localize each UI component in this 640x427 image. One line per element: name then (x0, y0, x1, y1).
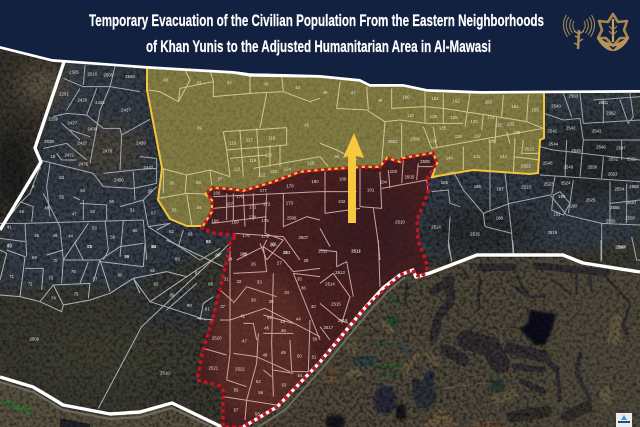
block number labels: 2504 (410, 136, 420, 141)
red zone: evacuation area (190, 150, 440, 427)
block number labels: 180 (311, 179, 319, 184)
block number labels: 2450 (114, 177, 124, 182)
block number labels: 135 (439, 126, 447, 131)
block number labels: 124 (284, 167, 292, 172)
block number labels: 2513 (335, 270, 345, 275)
block number labels: 179 (261, 234, 269, 239)
block number labels: 2427 (68, 121, 78, 126)
block number labels: 2514 (431, 225, 441, 230)
block number labels: 104 (380, 180, 388, 185)
block number labels: 163 (485, 100, 493, 105)
block number labels: 49 (281, 350, 286, 355)
block number labels: 81 (150, 268, 156, 273)
block number labels: 70 (53, 258, 58, 263)
block number labels: 2546 (596, 145, 606, 150)
block number labels: 40 (163, 77, 169, 82)
block number labels: 40 (7, 242, 12, 247)
farmland and dark wadi terrain (323, 266, 630, 427)
block number labels: 50 (109, 199, 115, 204)
block number labels: 142 (500, 154, 508, 159)
block number labels: 185 (441, 180, 449, 185)
block number labels: 2503 (388, 139, 398, 144)
block number labels: 69 (32, 255, 37, 260)
block number labels: 116 (229, 141, 237, 146)
block number labels: 190 (570, 203, 578, 208)
block number labels: 45 (304, 122, 310, 127)
block number labels: 120 (265, 152, 273, 157)
block number labels: 44 (296, 316, 301, 321)
block number labels: 2556 (610, 205, 620, 210)
block number labels: 52 (256, 379, 261, 384)
block number labels: 45 (264, 326, 270, 331)
block number labels: 57 (151, 211, 156, 216)
block number labels: 2521 (525, 146, 535, 151)
block number labels: 183 (283, 250, 291, 255)
block number labels: 177 (260, 188, 268, 193)
block number labels: 68 (7, 243, 12, 248)
block number labels: 2560 (617, 245, 627, 250)
block number labels: 134 (430, 138, 438, 143)
block number labels: 103 (390, 169, 398, 174)
block number labels: 2541 (548, 128, 558, 133)
zone grain texture (145, 66, 545, 427)
block number labels: 59 (110, 235, 116, 240)
block number labels: 44 (295, 85, 301, 90)
block number labels: 2554 (615, 187, 625, 192)
block number labels: 181 (270, 242, 278, 247)
title: of Khan Yunis to the Adjusted Humanitarian Area in Al-Mawasi (146, 38, 491, 56)
block number labels: 76 (71, 269, 76, 274)
icon: signal corps antenna emblem (563, 15, 595, 49)
block number labels: 187 (496, 186, 504, 191)
block number labels: 117 (246, 137, 253, 142)
block number labels: 2510 (395, 220, 405, 225)
block number labels: 189 (558, 194, 566, 199)
block number labels: 44 (68, 233, 74, 238)
block number labels: 2427 (78, 141, 88, 146)
block number labels: 53 (59, 175, 65, 180)
block number labels: 36 (301, 286, 306, 291)
block number labels: 165 (531, 107, 539, 112)
block number labels: 36 (196, 180, 201, 185)
block number labels: 47 (351, 91, 356, 96)
block number labels: 2559 (606, 218, 616, 223)
block number labels: 48 (44, 206, 50, 211)
block number labels: 2510 (160, 371, 170, 376)
block number labels: 42 (227, 80, 232, 85)
block number labels: 161 (431, 96, 439, 101)
block number labels: 90 (187, 303, 192, 308)
block number labels: 170 (236, 194, 244, 199)
block number labels: 2557 (627, 200, 637, 205)
block number labels: 37 (218, 177, 223, 182)
block number labels: 29 (283, 250, 288, 255)
block number labels: 58 (255, 411, 260, 416)
block number labels: 101 (367, 187, 375, 192)
block number labels: 2506 (420, 159, 430, 164)
block number labels: 166 (213, 191, 221, 196)
block number labels: 77 (93, 276, 98, 281)
block number labels: 168 (211, 218, 219, 223)
block number labels: 2505 (69, 69, 79, 74)
block number labels: 49 (53, 233, 58, 238)
block number labels: 2516 (548, 230, 558, 235)
block number labels: 2430 (88, 126, 98, 131)
block number labels: 91 (205, 306, 210, 311)
block number labels: 136 (455, 134, 463, 139)
block number labels: 2550 (588, 165, 598, 170)
block number labels: 162 (452, 99, 460, 104)
block number labels: 56 (148, 188, 153, 193)
block number labels: 131 (487, 115, 495, 120)
block number labels: 2540 (551, 103, 561, 108)
block number labels: 51 (130, 207, 135, 212)
block number labels: 2552 (627, 156, 637, 161)
block number labels: 186 (474, 184, 482, 189)
block number labels: 8 (32, 184, 35, 189)
block number labels: 2261 (59, 91, 69, 96)
block number labels: 138 (488, 138, 496, 143)
block number labels: 39 (269, 299, 274, 304)
block number labels: 71 (9, 274, 15, 279)
block number labels: 41 (197, 80, 202, 85)
neighborhood block lines: south-west grid (0, 240, 320, 420)
block number labels: 64 (206, 239, 211, 244)
block number labels: 27 (277, 261, 282, 266)
block number labels: 172 (263, 201, 271, 206)
block number labels: 140 (446, 155, 454, 160)
block number labels: 178 (286, 183, 294, 188)
block number labels: 2515 (470, 231, 480, 236)
block number labels: 2509 (30, 337, 40, 342)
block number labels: 46 (19, 209, 25, 214)
block number labels: 2523 (544, 182, 554, 187)
block number labels: 43 (280, 319, 286, 324)
block number labels: 46 (323, 90, 328, 95)
block number labels: 2560 (615, 245, 625, 250)
block number labels: 59 (313, 337, 318, 342)
block number labels: 65 (151, 244, 156, 249)
block number labels: 41 (240, 313, 246, 318)
block number labels: 58 (92, 226, 97, 231)
block number labels: 50 (297, 353, 302, 358)
block number labels: 182 (240, 252, 248, 257)
block number labels: 2505 (405, 175, 415, 180)
block number labels: 2447 (144, 165, 154, 170)
block number labels: 122 (258, 172, 266, 177)
block number labels: 2470 (103, 148, 113, 153)
block number labels: 86 (215, 252, 221, 257)
block number labels: 33 (257, 280, 262, 285)
block number labels: 2553 (608, 171, 618, 176)
block number labels: 128 (430, 114, 438, 119)
block number labels: 133 (507, 121, 515, 126)
block number labels: 130 (470, 119, 478, 124)
block number labels: 32 (237, 279, 242, 284)
block number labels: 119 (249, 158, 257, 163)
block number labels: 35 (297, 277, 302, 282)
block number labels: 191 (553, 211, 561, 216)
block number labels: 2549 (564, 165, 574, 170)
block number labels: 48 (263, 352, 268, 357)
block number labels: 80 (118, 272, 123, 277)
block number labels: 55 (59, 195, 65, 200)
title (89, 12, 544, 56)
block number labels: 2259 (49, 117, 59, 122)
block number labels: 2628 (44, 139, 54, 144)
neighborhood block lines: north-west grid (0, 65, 320, 260)
neighborhood block lines: south-east grid (320, 240, 601, 340)
block number labels: 31 (224, 277, 229, 282)
block number labels: 52 (90, 209, 96, 214)
navy header band (0, 0, 640, 91)
block number labels: 56 (258, 390, 264, 395)
block number labels: 164 (511, 104, 519, 109)
block number labels: 2544 (549, 141, 559, 146)
block number labels: 78 (88, 244, 93, 249)
block number labels: 39 (197, 126, 202, 131)
block number labels: 2432 (95, 100, 105, 105)
block number labels: 25 (243, 251, 248, 256)
block number labels: 2475 (79, 161, 89, 166)
block number labels: 28 (304, 258, 309, 263)
block number labels: 176 (242, 233, 250, 238)
block number labels: 2439 (136, 141, 146, 146)
block number labels: 2522 (235, 367, 245, 372)
block number labels: 2505 (104, 72, 114, 77)
block number labels: 2513 (521, 185, 531, 190)
block number labels: 102 (338, 199, 346, 204)
block number labels: 2520 (212, 336, 222, 341)
block number labels: 9 (39, 166, 42, 171)
block number labels: 2512 (351, 248, 361, 253)
block number labels: 82 (154, 282, 159, 287)
block number labels: 38 (251, 297, 256, 302)
block number labels: 129 (450, 115, 458, 120)
block number labels: 2511 (318, 248, 328, 253)
block number labels: 118 (268, 136, 276, 141)
block number labels: 2542 (566, 126, 576, 131)
block number labels: 37 (220, 304, 226, 309)
block number labels: 127 (407, 113, 415, 118)
block number labels: 2516 (88, 72, 98, 77)
block number labels: 85 (206, 239, 211, 244)
block number labels: 34 (197, 205, 202, 210)
block number labels: 48 (378, 98, 383, 103)
block number labels: 2555 (629, 184, 639, 189)
red dashed evacuation boundary (197, 153, 437, 427)
block number labels: 2517 (324, 325, 334, 330)
block number labels: 34 (284, 290, 290, 295)
yellow evacuation arrow (343, 133, 364, 223)
block number labels: 169 (231, 220, 239, 225)
block number labels: 175 (261, 218, 269, 223)
road beside southern border (0, 277, 405, 427)
block number labels: 50 (334, 154, 340, 159)
block number labels: 46 (281, 328, 286, 333)
block number labels: 41 (7, 225, 12, 230)
block number labels: 174 (249, 215, 257, 220)
block number labels: 2558 (625, 216, 635, 221)
block number labels: 79 (124, 254, 130, 259)
block number labels: 55 (234, 387, 239, 392)
block number labels: 2562 (606, 111, 616, 116)
block number labels: 40 (311, 304, 316, 309)
block number labels: 2471 (65, 152, 75, 157)
block number labels: 47 (242, 338, 247, 343)
block number labels: 45 (34, 233, 40, 238)
block number labels: 2547 (616, 146, 626, 151)
block number labels: 30 (270, 242, 276, 247)
block number labels: 83 (175, 257, 180, 262)
block number labels: 173 (286, 201, 294, 206)
block number labels: 74 (51, 296, 56, 301)
block number labels: 2520 (125, 74, 135, 79)
block number labels: 141 (473, 154, 481, 159)
block number labels: 2551 (609, 157, 619, 162)
small publisher logo (616, 413, 632, 427)
block number labels: 125 (307, 161, 315, 166)
block number labels: 75 (74, 291, 79, 296)
block number labels: 63 (188, 231, 193, 236)
block number labels: 2514 (325, 282, 335, 287)
block number labels: 51 (312, 355, 317, 360)
block number labels: 139 (513, 130, 521, 135)
block number labels: 89 (170, 292, 175, 297)
block number labels: 2543 (592, 128, 602, 133)
neighborhood block lines: north-east grid (320, 82, 640, 260)
block number labels: 121 (234, 166, 242, 171)
block number labels: 2516 (338, 318, 348, 323)
block number labels: 2525 (586, 197, 596, 202)
block number labels: 24 (228, 257, 233, 262)
icon: IDF badge (597, 14, 629, 51)
block number labels: 72 (28, 281, 33, 286)
block number labels: 18 (50, 154, 56, 159)
block number labels: 188 (496, 216, 504, 221)
block number labels: 88 (208, 281, 214, 286)
block number labels: 2563 (569, 93, 579, 98)
block number labels: 54 (80, 188, 86, 193)
block number labels: 2548 (543, 161, 553, 166)
block number labels: 2507 (299, 235, 309, 240)
block number labels: 33 (172, 207, 177, 212)
block number labels: 160 (402, 95, 410, 100)
block number labels: 54 (298, 373, 303, 378)
block number labels: 35 (169, 181, 175, 186)
block number labels: 2561 (599, 100, 609, 105)
block number labels: 73 (48, 276, 54, 281)
block number labels: 47 (72, 211, 77, 216)
block number labels: 167 (226, 201, 234, 206)
block number labels: 42 (267, 315, 272, 320)
block number labels: 2521 (209, 366, 219, 371)
block number labels: 2515 (331, 302, 341, 307)
block number labels: 57 (234, 407, 239, 412)
block number labels: 2545 (571, 148, 581, 153)
block number labels: 2511 (351, 248, 361, 253)
yellow zone: adjusted humanitarian area (147, 66, 544, 226)
block number labels: 61 (87, 244, 92, 249)
block number labels: 137 (474, 133, 482, 138)
block number labels: 26 (251, 261, 256, 266)
block number labels: 84 (152, 244, 157, 249)
block number labels: 2426 (78, 97, 88, 102)
block number labels: 2524 (561, 181, 571, 186)
block number labels: 132 (495, 122, 503, 127)
block number labels: 123 (270, 169, 278, 174)
block number labels: 100 (339, 177, 347, 182)
block number labels: 60 (133, 228, 138, 233)
block number labels: 2522 (521, 163, 531, 168)
block number labels: 2437 (121, 107, 131, 112)
yellow zone border (147, 68, 544, 226)
block number labels: 2506 (287, 216, 297, 221)
block number labels: 53 (282, 382, 287, 387)
block number labels: 66 (124, 254, 130, 259)
block number labels: 171 (249, 205, 257, 210)
block number labels: 43 (264, 81, 269, 86)
block number labels: 62 (169, 229, 175, 234)
block number labels: 87 (195, 271, 200, 276)
